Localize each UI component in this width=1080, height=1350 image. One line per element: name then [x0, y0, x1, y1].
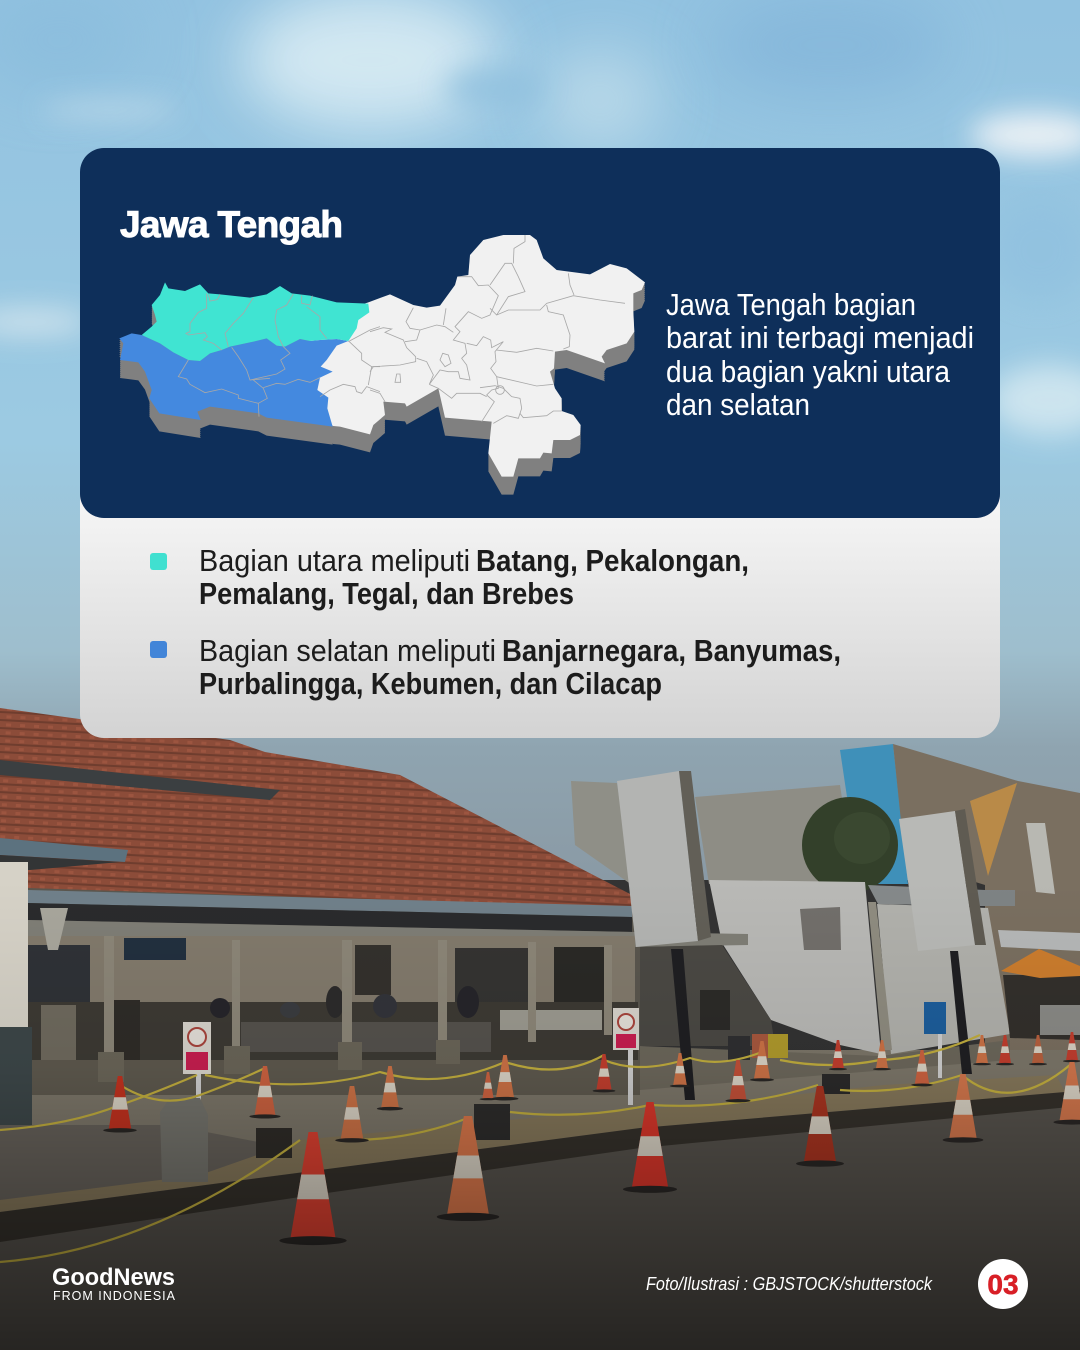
panel: navy map card [80, 148, 1000, 518]
traffic cones [103, 1032, 1080, 1245]
legend item: south region: Bagian selatan meliputi [199, 633, 496, 668]
logo: GoodNews from Indonesia: FROM INDONESIA [53, 1289, 176, 1303]
description text: Jawa Tengah bagian [666, 287, 916, 322]
left pillar and awning [0, 838, 128, 1125]
legend item: south region [150, 633, 841, 701]
station veranda [28, 888, 1010, 1095]
page number [978, 1259, 1028, 1309]
map: southern regions [119, 333, 348, 427]
right buildings [571, 744, 1080, 1054]
safety ropes [0, 1035, 1070, 1262]
station roof [0, 708, 632, 910]
signs [183, 1002, 946, 1105]
map: district borders west [178, 293, 380, 417]
dark gradient overlay [0, 880, 1080, 1350]
map: Central Java [119, 235, 645, 495]
road and ground [0, 1050, 1080, 1350]
legend item: north region: Pemalang, Tegal, dan Brebes [199, 576, 574, 611]
map: district borders east [370, 235, 625, 423]
bins and planters [160, 1034, 850, 1182]
logo: GoodNews from Indonesia [52, 1264, 176, 1303]
legend item: south region: Banjarnegara, Banyumas, [502, 633, 841, 668]
logo: GoodNews from Indonesia: GoodNews [52, 1264, 175, 1291]
legend item: north region: Batang, Pekalongan, [476, 543, 749, 578]
map extrusion shadow [119, 237, 645, 495]
heading: Jawa Tengah [120, 204, 343, 245]
photo credit: Foto/Ilustrasi : GBJSTOCK/shutterstock [646, 1274, 933, 1294]
panel: light description card [80, 490, 1000, 738]
description text [666, 287, 974, 422]
legend item: north region [150, 543, 749, 611]
description text: barat ini terbagi menjadi [666, 320, 974, 355]
map: northern regions [142, 282, 369, 361]
legend item: south region: Purbalingga, Kebumen, dan Cilacap [199, 666, 662, 701]
map: eastern regions [300, 235, 645, 477]
sky [0, 0, 1080, 880]
page number: 03 [987, 1269, 1019, 1300]
blank billboards [617, 771, 986, 1100]
description text: dan selatan [666, 387, 810, 422]
description text: dua bagian yakni utara [666, 354, 951, 389]
legend item: north region: Bagian utara meliputi [199, 543, 470, 578]
